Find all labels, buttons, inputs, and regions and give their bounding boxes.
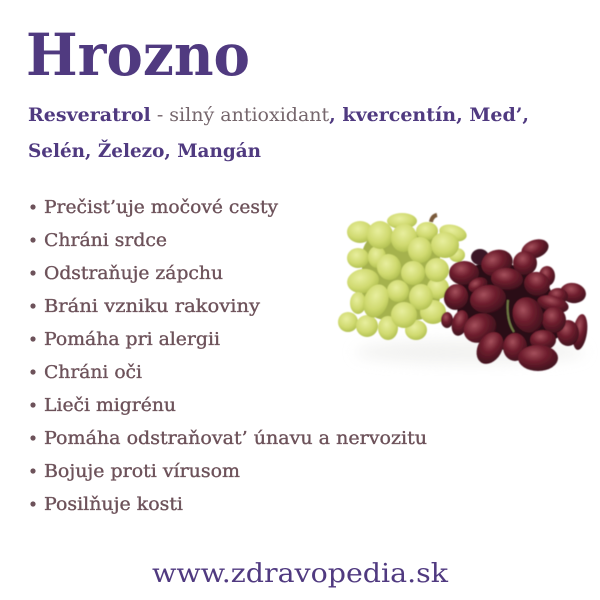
website footer: www.zdravopedia.sk [152,559,448,589]
benefits list: Bojuje proti vírusom [44,462,240,482]
benefits list: Odstraňuje zápchu [44,264,223,284]
benefits list: Pomáha odstraňovat’ únavu a nervozitu [44,429,427,449]
benefits list: Pomáha pri alergii [44,330,220,350]
benefits list: Chráni srdce [44,231,167,251]
grapes photo [338,213,589,371]
nutrients text: Selén, Železo, Mangán [28,139,262,162]
nutrients text: Resveratrol - silný antioxidant , kvercentín, Med’, [28,105,529,126]
nutrients text [28,105,529,162]
title: Hrozno [26,21,250,89]
benefits list: Posilňuje kosti [44,495,183,515]
benefits list: Prečist’uje močové cesty [44,198,278,218]
benefits list: Lieči migrénu [44,396,176,416]
benefits list: Chráni oči [44,363,142,383]
benefits list [30,198,427,515]
benefits list: Bráni vzniku rakoviny [44,297,260,317]
